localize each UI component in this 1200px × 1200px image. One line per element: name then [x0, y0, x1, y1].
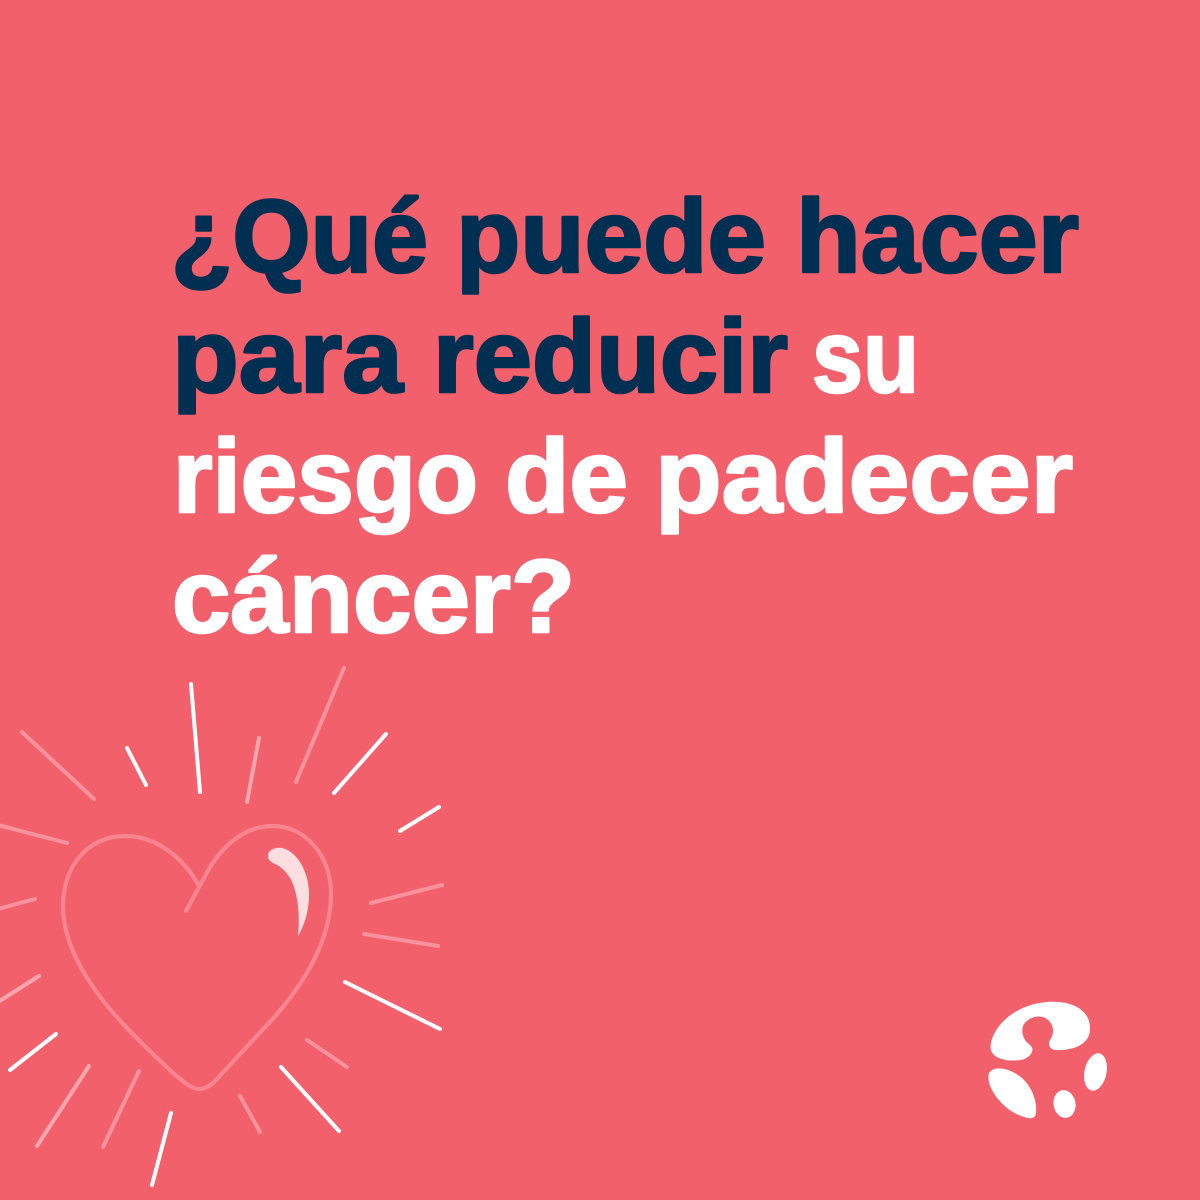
title: de: [505, 419, 628, 535]
logo: right dot: [1081, 1051, 1110, 1093]
title: reducir: [433, 299, 788, 415]
title: su: [812, 299, 919, 415]
title: ¿Qué: [171, 179, 428, 295]
title: para: [172, 299, 404, 415]
logo: bottom dot: [1051, 1088, 1078, 1120]
title: padecer: [655, 419, 1073, 535]
icon: heart highlight: [268, 848, 309, 936]
title: [171, 179, 1079, 655]
icon: heart with rays: [0, 668, 442, 1185]
icon: white rays: [10, 684, 440, 1185]
logo: top shape: [991, 1002, 1090, 1060]
title: hacer: [796, 179, 1079, 295]
icon: pale rays: [0, 668, 442, 1147]
title: cáncer?: [172, 539, 575, 655]
title: puede: [456, 179, 766, 295]
icon: heart outline: [63, 826, 331, 1089]
logo: [988, 1002, 1110, 1120]
logo: left shape: [988, 1068, 1036, 1118]
title: riesgo: [173, 419, 478, 535]
